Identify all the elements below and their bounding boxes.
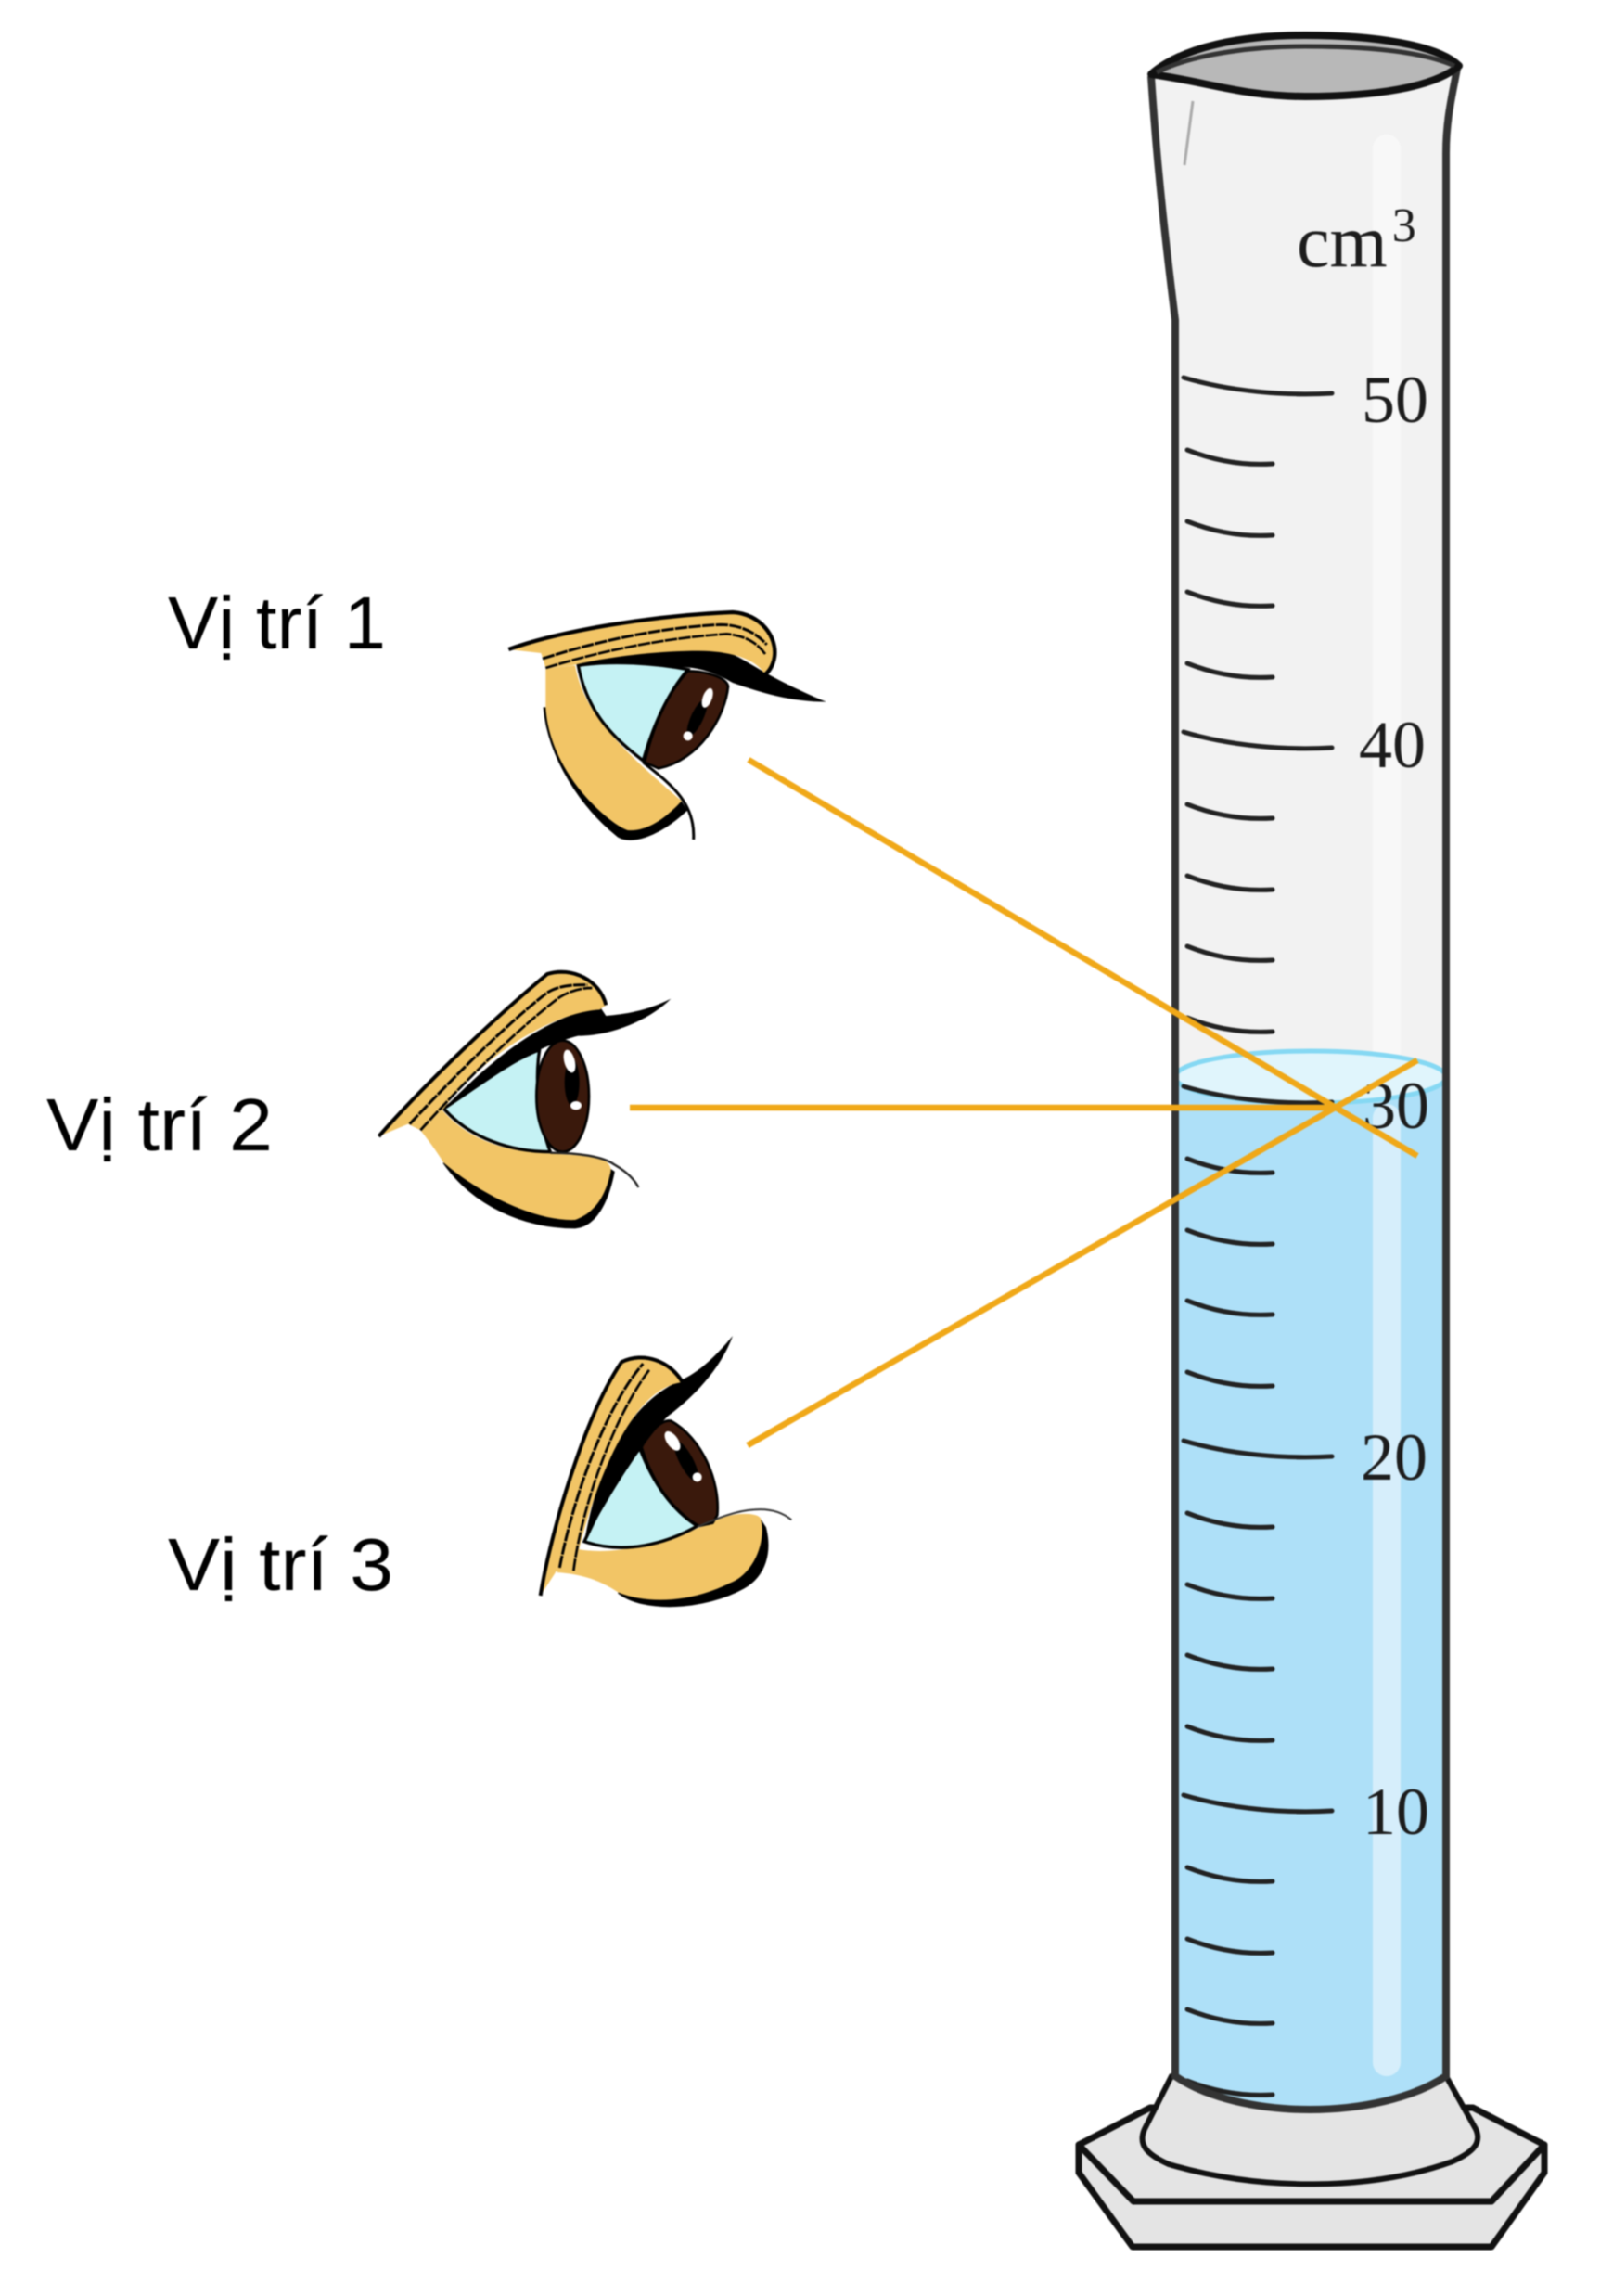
eye: position 2 [378, 972, 671, 1227]
glass tube [1151, 69, 1457, 2110]
sight line from position 1 [749, 760, 1417, 1156]
label: position 1: Vị trí 1 [168, 582, 386, 664]
unit label cm3: 3 [1392, 199, 1416, 252]
scale number 50: 50 [1362, 363, 1428, 437]
scale number 30: 30 [1363, 1069, 1429, 1143]
glass highlight [1373, 135, 1401, 1109]
scale tick marks [1184, 378, 1332, 2095]
scratch mark on glass [1184, 101, 1193, 165]
eye: position 1 [508, 612, 826, 840]
liquid surface [1175, 1051, 1446, 1103]
liquid highlight [1373, 1104, 1401, 2076]
scale number 40: 40 [1359, 708, 1426, 782]
scale number 20: 20 [1361, 1420, 1427, 1494]
graduated cylinder [1079, 35, 1544, 2247]
eye: position 3 [541, 1336, 791, 1606]
cylinder foot [1079, 2076, 1544, 2247]
tube walls [1151, 69, 1457, 2110]
scale number 10: 10 [1363, 1775, 1429, 1849]
label: position 2: Vị trí 2 [46, 1084, 273, 1166]
cylinder rim [1151, 35, 1459, 96]
sight line from position 3 [748, 1060, 1417, 1445]
liquid column [1175, 1076, 1446, 2110]
sight line from position 2 [630, 1105, 1336, 1110]
label: position 3: Vị trí 3 [168, 1523, 393, 1606]
unit label cm3: cm [1297, 201, 1388, 283]
